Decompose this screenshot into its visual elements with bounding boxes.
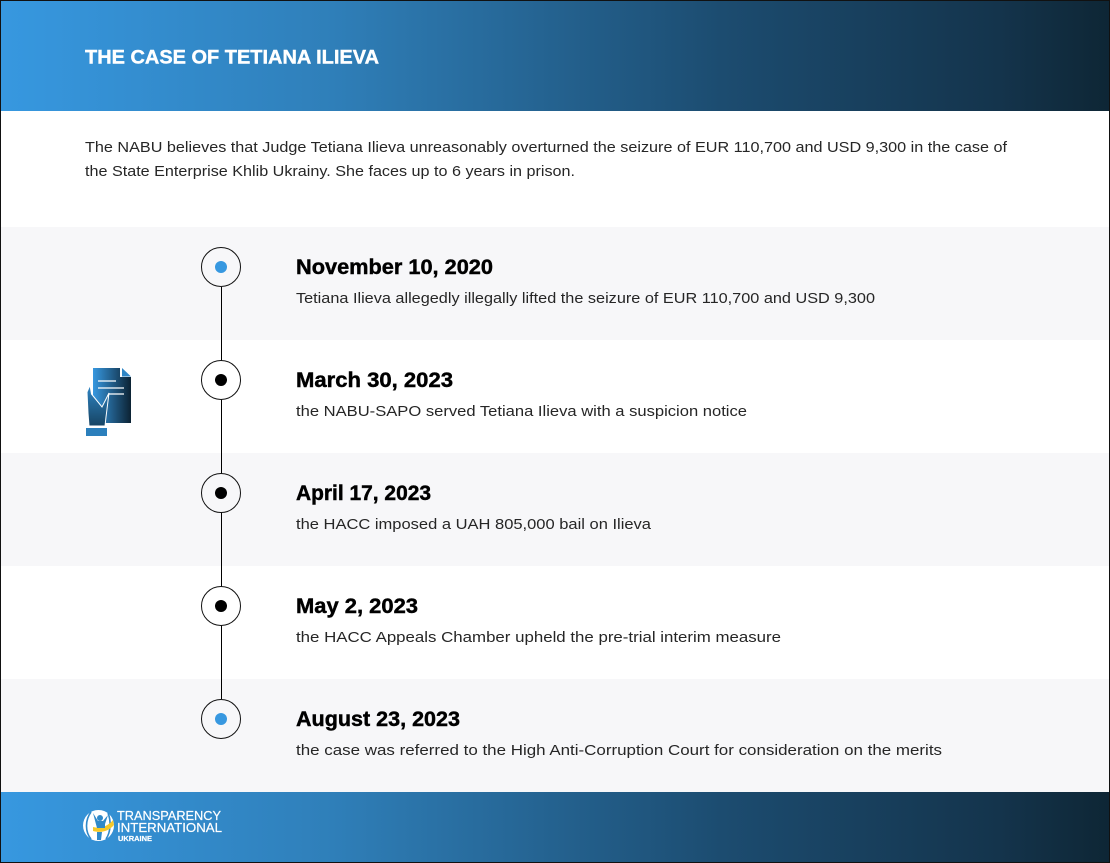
marker: black dot [202, 360, 240, 400]
logo wordmark: UKRAINE [118, 836, 152, 843]
logo wordmark: TRANSPARENCY [117, 809, 222, 823]
timeline event: March 30, 2023 [202, 360, 747, 420]
logo globe [83, 810, 114, 841]
date: November 10, 2020 [296, 256, 493, 279]
logo wordmark: INTERNATIONAL [117, 821, 222, 835]
intro text: the State Enterprise Khlib Ukrainy. She faces up to 6 years in prison. [85, 163, 575, 180]
marker: black dot [202, 474, 240, 512]
date: March 30, 2023 [296, 369, 453, 392]
timeline event: November 10, 2020 [202, 248, 875, 307]
timeline event: August 23, 2023 [202, 700, 942, 759]
date: April 17, 2023 [296, 482, 431, 505]
date: August 23, 2023 [296, 708, 460, 731]
timeline connector line [220, 287, 222, 699]
description: the HACC imposed a UAH 805,000 bail on Ilieva [296, 516, 652, 533]
timeline event: April 17, 2023 [202, 474, 652, 533]
timeline event: May 2, 2023 [202, 586, 781, 646]
marker: blue dot [202, 248, 240, 286]
intro text [85, 139, 1008, 180]
description: the HACC Appeals Chamber upheld the pre-trial interim measure [296, 629, 781, 646]
footer banner [0, 792, 1110, 863]
logo: Transparency International Ukraine [83, 809, 222, 843]
icon: hand holding document [86, 368, 131, 436]
marker: blue dot [202, 700, 240, 738]
marker: black dot [202, 586, 240, 626]
logo wordmark [117, 809, 222, 843]
intro text: The NABU believes that Judge Tetiana Ilieva unreasonably overturned the seizure of EUR 110,700 and USD 9,300 in the case of [85, 139, 1008, 156]
description: the case was referred to the High Anti-Corruption Court for consideration on the merits [296, 742, 942, 759]
date: May 2, 2023 [296, 595, 418, 618]
description: the NABU-SAPO served Tetiana Ilieva with a suspicion notice [296, 403, 747, 420]
title: THE CASE OF TETIANA ILIEVA [85, 46, 379, 68]
description: Tetiana Ilieva allegedly illegally lifted the seizure of EUR 110,700 and USD 9,300 [296, 290, 875, 307]
header banner [0, 0, 1110, 111]
panel: row backgrounds [0, 227, 1110, 792]
